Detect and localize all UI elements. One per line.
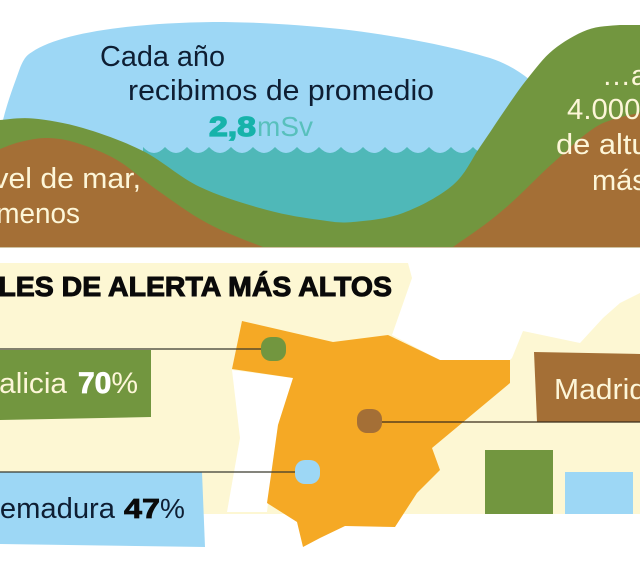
- text: sea level: [0, 163, 141, 230]
- panel: radiation by altitude landscape: [0, 22, 640, 248]
- bar: green: [485, 450, 553, 514]
- white sea area: [227, 370, 293, 512]
- Madrid leader: [382, 421, 640, 423]
- map background: [0, 263, 640, 514]
- green terrain: [0, 25, 640, 247]
- Extremadura marker: [295, 460, 320, 484]
- Madrid text: Madrid: [554, 374, 640, 406]
- text: annual average: recibimos de promedio: [128, 75, 434, 107]
- map of Spain: [232, 321, 510, 547]
- value: 2,8 mSv: [209, 111, 313, 142]
- Madrid box: [534, 352, 640, 422]
- Galicia value: 70%: [78, 367, 138, 400]
- Madrid label: [357, 352, 640, 433]
- text: high altitude: [556, 60, 640, 197]
- text: annual average: [100, 41, 434, 107]
- brown earth left: [0, 138, 263, 247]
- Extremadura label: [0, 460, 320, 547]
- unit mSv: mSv: [257, 111, 313, 142]
- Extremadura leader: [0, 471, 296, 473]
- text: annual average: Cada año: [100, 41, 225, 73]
- Galicia marker: [261, 337, 286, 361]
- Extremadura value: 47%: [124, 493, 185, 524]
- Extremadura box: [0, 472, 205, 547]
- Galicia label: [0, 337, 286, 420]
- brown earth right: [453, 113, 640, 247]
- sky: [3, 22, 530, 200]
- panel: map of alert levels: [0, 263, 640, 547]
- ground edge: [0, 247, 640, 248]
- Madrid marker: [357, 409, 382, 433]
- Galicia leader: [0, 348, 262, 350]
- water: [143, 147, 495, 240]
- bar: blue: [565, 472, 633, 514]
- Galicia box: [0, 350, 151, 420]
- number 2,8: 2,8: [209, 111, 256, 142]
